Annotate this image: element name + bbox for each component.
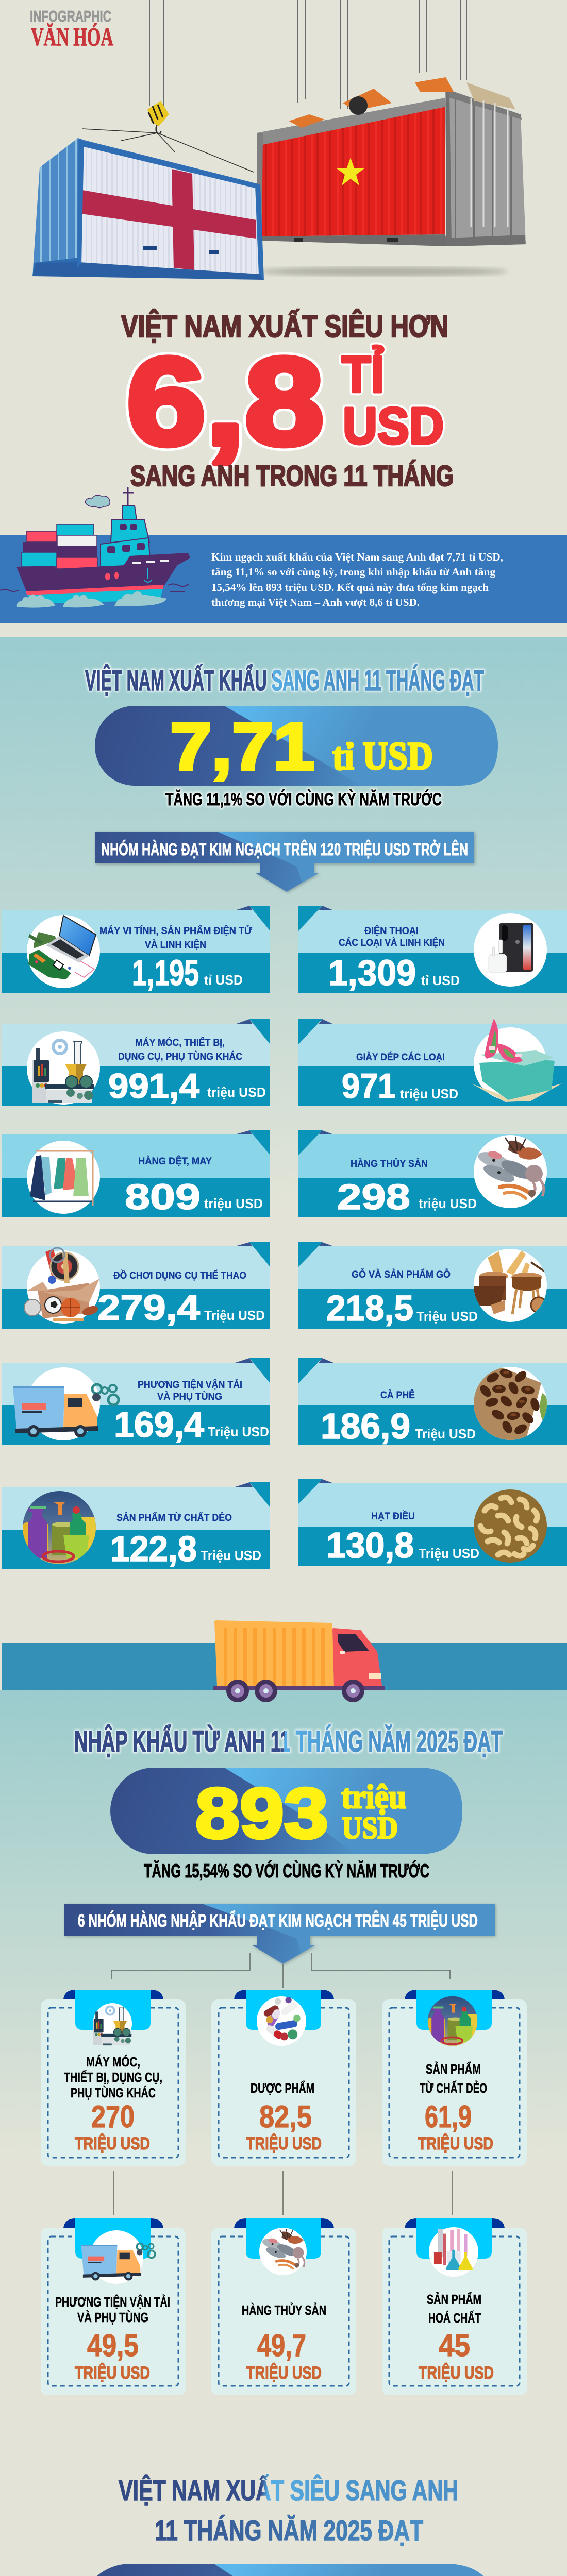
intro paragraph: thương mại Việt Nam – Anh vượt 8,6 tỉ USD. bbox=[211, 596, 420, 608]
card: import plastics: TRIỆU USD bbox=[418, 2134, 493, 2154]
title bbox=[121, 309, 454, 493]
card: import chemicals: 45 bbox=[439, 2328, 470, 2363]
unit: USD: USD bbox=[343, 397, 444, 455]
pill: 893 triệu USD: triệu bbox=[341, 1778, 406, 1816]
Vietnam container: gray door side bbox=[445, 82, 526, 246]
pill: 893 triệu USD bbox=[110, 1768, 462, 1854]
icon: toys box bbox=[24, 1248, 99, 1320]
card: computers: VÀ LINH KIỆN bbox=[145, 939, 206, 951]
card: import seafood: HÀNG THỦY SẢN bbox=[242, 2302, 326, 2318]
card: computers: MÁY VI TÍNH, SẢN PHẨM ĐIỆN TỬ bbox=[99, 925, 252, 937]
card: seafood bbox=[298, 1130, 567, 1217]
intro paragraph bbox=[211, 551, 503, 608]
card: vehicles: Triệu USD bbox=[208, 1424, 269, 1439]
panel: export section background bbox=[0, 637, 567, 1247]
card: import plastics: TỪ CHẤT DẺO bbox=[420, 2080, 487, 2096]
card: footwear bbox=[298, 1019, 567, 1106]
trade surplus heading: VIỆT NAM XUẤT SIÊU SANG ANH bbox=[119, 2474, 458, 2506]
icon: pills bbox=[262, 1997, 301, 2040]
card: phones: CÁC LOẠI VÀ LINH KIỆN bbox=[339, 937, 445, 948]
card: import machinery: MÁY MÓC, bbox=[86, 2054, 140, 2070]
icon: clothes rail bbox=[30, 1151, 93, 1206]
icon: phone and earbuds bbox=[489, 923, 533, 973]
foam bbox=[17, 594, 55, 608]
icon: crane hook bbox=[147, 101, 169, 133]
card: import pharma bbox=[211, 1990, 356, 2166]
card: plastics: Triệu USD bbox=[201, 1548, 261, 1563]
card: toys and sports bbox=[2, 1242, 270, 1329]
card: import pharma: TRIỆU USD bbox=[246, 2134, 322, 2154]
card: phones: ĐIỆN THOẠI bbox=[364, 925, 419, 937]
card: vehicles: PHƯƠNG TIỆN VẬN TẢI bbox=[138, 1379, 242, 1391]
export growth note: TĂNG 11,1% SO VỚI CÙNG KỲ NĂM TRƯỚC bbox=[165, 790, 442, 809]
pill: 893 triệu USD: USD bbox=[342, 1811, 398, 1845]
crane cables bbox=[82, 0, 466, 172]
banner: import groups with arrow bbox=[64, 1904, 495, 1964]
card: computers bbox=[2, 906, 270, 993]
card: plastics: SẢN PHẨM TỪ CHẤT DẺO bbox=[116, 1512, 232, 1523]
card: machinery: DỤNG CỤ, PHỤ TÙNG KHÁC bbox=[118, 1051, 242, 1062]
intro paragraph: tăng 11,1% so với cùng kỳ, trong khi nhập khẩu từ Anh tăng bbox=[211, 566, 495, 578]
pill: 7,71 tỉ USD bbox=[95, 706, 498, 786]
card: import machinery: TRIỆU USD bbox=[75, 2134, 150, 2154]
card: textiles: triệu USD bbox=[204, 1196, 263, 1211]
card: textiles bbox=[2, 1130, 270, 1217]
card: import pharma: DƯỢC PHẨM bbox=[251, 2080, 314, 2096]
card: cashew: 130,8 bbox=[326, 1525, 414, 1565]
pill: 7,71 tỉ USD: 7,71 bbox=[170, 709, 314, 784]
unit: tỉ: TỈ bbox=[342, 346, 384, 403]
card: import plastics bbox=[382, 1990, 527, 2166]
big number 6,8: 6,8 bbox=[127, 332, 324, 470]
card: vehicles bbox=[2, 1358, 270, 1445]
title line 3: SANG ANH TRONG 11 THÁNG bbox=[130, 460, 454, 493]
title line 1: VIỆT NAM XUẤT SIÊU HƠN bbox=[121, 309, 448, 344]
card: plastics: 122,8 bbox=[110, 1529, 197, 1569]
card: import chemicals: SẢN PHẨM bbox=[427, 2292, 481, 2307]
icon: cargo truck bbox=[213, 1620, 385, 1702]
card: footwear: GIÀY DÉP CÁC LOẠI bbox=[356, 1052, 445, 1063]
card: machinery: 991,4 bbox=[108, 1066, 199, 1106]
card: computers: tỉ USD bbox=[204, 972, 243, 988]
card: computers: 1,195 bbox=[132, 953, 199, 993]
card: phones: 1,309 bbox=[328, 953, 416, 993]
icon: cashew nuts bbox=[480, 1497, 537, 1556]
England container: St George flag bbox=[32, 138, 264, 280]
intro band bbox=[0, 535, 567, 623]
card: seafood: triệu USD bbox=[419, 1196, 477, 1211]
card: toys and sports: 279,4 bbox=[97, 1287, 200, 1328]
card: coffee bbox=[298, 1358, 567, 1446]
big number 6,8: 6,8 bbox=[127, 332, 324, 470]
logo: Infographic Văn Hóa: VĂN HÓA bbox=[31, 22, 113, 51]
card: import machinery: THIẾT BỊ, DỤNG CỤ, bbox=[64, 2070, 162, 2085]
panel: import section background bbox=[0, 1643, 567, 2159]
card: import machinery bbox=[41, 1990, 186, 2166]
icon: coffee beans bbox=[474, 1367, 548, 1440]
card: import seafood bbox=[211, 2218, 356, 2395]
icon: shoes on box bbox=[471, 1019, 562, 1102]
card: import vehicles: TRIỆU USD bbox=[75, 2363, 150, 2383]
card: import pharma: 82,5 bbox=[259, 2099, 312, 2134]
card: machinery: triệu USD bbox=[207, 1084, 266, 1100]
card: import seafood: 49,7 bbox=[257, 2328, 306, 2363]
card: cashew bbox=[298, 1479, 567, 1566]
unit: USD: USD bbox=[343, 397, 444, 455]
trade surplus heading: 11 THÁNG NĂM 2025 ĐẠT bbox=[155, 2514, 423, 2547]
icon: seafood bbox=[476, 1137, 544, 1198]
card: wood: GỖ VÀ SẢN PHẨM GỖ bbox=[352, 1269, 451, 1280]
card: wood: Triệu USD bbox=[416, 1309, 478, 1324]
icon: plastic products bbox=[23, 1491, 98, 1564]
card: wood bbox=[298, 1242, 567, 1329]
card: cashew: HẠT ĐIỀU bbox=[371, 1511, 415, 1522]
logo: Infographic Văn Hóa: INFOGRAPHIC bbox=[30, 7, 111, 25]
banner: export groups with arrow bbox=[95, 832, 474, 892]
icon: delivery truck bbox=[13, 1384, 119, 1437]
unit: tỉ: TỈ bbox=[342, 346, 384, 403]
card: coffee: CÀ PHÊ bbox=[380, 1389, 415, 1401]
card: import chemicals bbox=[382, 2218, 527, 2395]
intro paragraph: Kim ngạch xuất khẩu của Việt Nam sang Anh đạt 7,71 tỉ USD, bbox=[211, 551, 503, 563]
icon: seafood small bbox=[261, 2229, 305, 2268]
card: footwear: triệu USD bbox=[400, 1086, 458, 1101]
card: import plastics: 61,9 bbox=[425, 2099, 472, 2134]
card: import machinery: 270 bbox=[91, 2099, 135, 2134]
icon: plastics small bbox=[428, 1996, 479, 2046]
card: import plastics: SẢN PHẨM bbox=[426, 2061, 481, 2077]
card: phones bbox=[298, 906, 567, 993]
card: plastics bbox=[2, 1482, 270, 1569]
lifting gear bbox=[289, 77, 454, 128]
card: textiles: 809 bbox=[125, 1177, 201, 1217]
illustration: hanging containers bbox=[32, 0, 526, 280]
intro paragraph: 15,54% lên 893 triệu USD. Kết quả này đưa tổng kim ngạch bbox=[211, 581, 489, 594]
shadow under containers bbox=[260, 267, 508, 276]
logo: Infographic Văn Hóa bbox=[30, 7, 113, 51]
card: coffee: Triệu USD bbox=[415, 1426, 476, 1442]
card: import machinery: PHỤ TÙNG KHÁC bbox=[71, 2085, 156, 2100]
card: import chemicals: HOÁ CHẤT bbox=[428, 2310, 481, 2326]
card: toys and sports: ĐỒ CHƠI DỤNG CỤ THỂ THAO bbox=[113, 1270, 246, 1281]
icon: machinery bbox=[32, 1040, 94, 1103]
icon: truck small bbox=[81, 2243, 155, 2280]
card: phones: tỉ USD bbox=[421, 973, 460, 988]
card: machinery bbox=[2, 1019, 270, 1106]
card: import chemicals: TRIỆU USD bbox=[419, 2363, 494, 2383]
card: toys and sports: Triệu USD bbox=[204, 1308, 265, 1323]
card: cashew: Triệu USD bbox=[419, 1546, 479, 1561]
card: import vehicles: PHƯƠNG TIỆN VẬN TẢI bbox=[55, 2294, 170, 2310]
card: import vehicles bbox=[41, 2218, 186, 2395]
trade surplus heading bbox=[119, 2474, 458, 2547]
icon: wood stumps and stool bbox=[474, 1250, 546, 1314]
card: vehicles: 169,4 bbox=[114, 1404, 204, 1445]
card: textiles: HÀNG DỆT, MAY bbox=[138, 1156, 212, 1167]
card: import seafood: TRIỆU USD bbox=[246, 2363, 322, 2383]
card: coffee: 186,9 bbox=[321, 1406, 410, 1446]
pill: 893 triệu USD: 893 bbox=[195, 1774, 328, 1853]
card: machinery: MÁY MÓC, THIẾT BỊ, bbox=[135, 1037, 225, 1048]
icon: lab flasks bbox=[434, 2229, 473, 2270]
import growth note: TĂNG 15,54% SO VỚI CÙNG KỲ NĂM TRƯỚC bbox=[144, 1860, 429, 1882]
card: import vehicles: VÀ PHỤ TÙNG bbox=[77, 2310, 148, 2325]
card: seafood: HÀNG THỦY SẢN bbox=[351, 1158, 428, 1170]
icon: yellow star bbox=[336, 158, 365, 185]
pill: 7,71 tỉ USD: tỉ USD bbox=[332, 735, 433, 778]
icon: laptop and circuit board bbox=[28, 916, 96, 979]
England container: side face bbox=[32, 138, 84, 276]
Vietnam container: red flag side bbox=[257, 77, 454, 246]
pill: 6,8 tỉ USD bbox=[79, 2564, 497, 2576]
connector lines bbox=[111, 1953, 453, 2215]
card: footwear: 971 bbox=[342, 1066, 396, 1106]
icon: machinery small bbox=[93, 2007, 131, 2045]
card: seafood: 298 bbox=[337, 1177, 410, 1217]
cloud bbox=[85, 495, 110, 508]
icon: cargo ship bbox=[0, 487, 190, 608]
card: import vehicles: 49,5 bbox=[87, 2328, 139, 2363]
card: wood: 218,5 bbox=[326, 1288, 413, 1328]
card: vehicles: VÀ PHỤ TÙNG bbox=[157, 1391, 222, 1402]
